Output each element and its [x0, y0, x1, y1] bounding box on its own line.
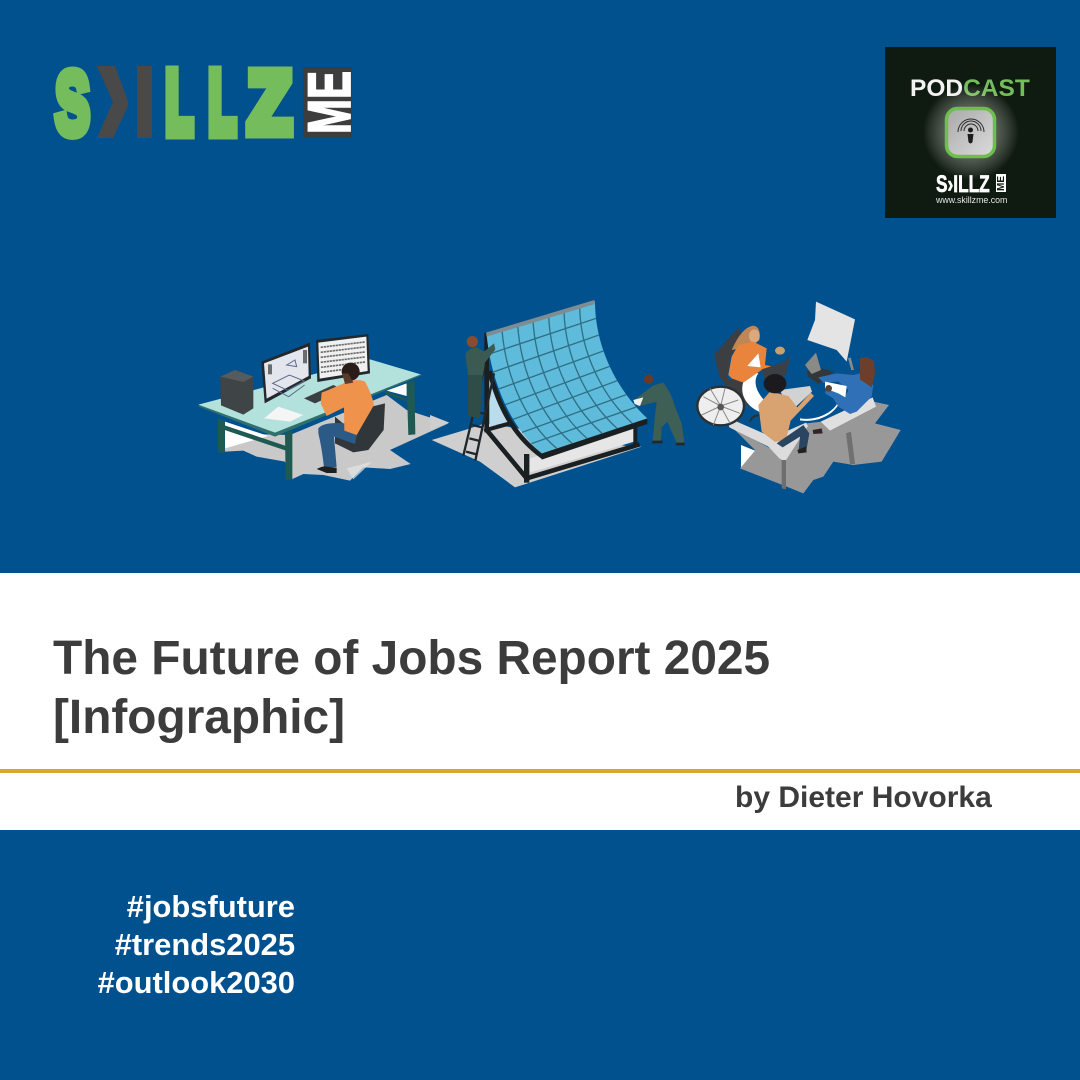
shirt	[321, 380, 374, 435]
logo chevron	[97, 66, 128, 138]
keyboard	[304, 385, 344, 403]
laptop left	[762, 355, 791, 380]
floor and chairs	[733, 402, 901, 493]
logo: SKILLZ ME: S	[56, 55, 90, 153]
left chair seat	[728, 419, 808, 462]
gold divider	[0, 769, 1080, 773]
hashtags: #jobsfuture	[127, 889, 295, 924]
title: [Infographic]	[53, 691, 345, 744]
logo: SKILLZ ME: Z	[248, 53, 291, 151]
podcast icon	[946, 108, 994, 156]
illustration: meeting around table	[697, 302, 901, 493]
ladder	[463, 365, 494, 461]
jeans	[318, 423, 357, 467]
wheelchair	[697, 328, 760, 425]
floor	[432, 423, 642, 487]
shoe	[317, 466, 337, 473]
office chair	[335, 403, 385, 452]
podcast heading: PODCAST	[910, 75, 1030, 102]
desk top	[197, 360, 422, 437]
title: The Future of Jobs Report 2025	[53, 632, 770, 685]
curved panel	[487, 302, 647, 453]
worker on ladder	[465, 336, 495, 418]
logo ME badge: ME	[296, 71, 363, 134]
shoes	[813, 428, 823, 434]
desk legs	[218, 380, 415, 480]
coffee cup	[775, 347, 785, 355]
author byline: by Dieter Hovorka	[735, 781, 992, 814]
title	[53, 632, 770, 744]
head	[342, 363, 360, 381]
woman in orange	[728, 326, 773, 383]
whiteboard	[807, 302, 855, 362]
panel grid	[489, 306, 636, 448]
woman in blue	[818, 357, 875, 414]
laptop right	[807, 368, 834, 384]
logo: SKILLZ ME: L	[166, 54, 193, 151]
illustration: solar panel installers	[430, 300, 685, 487]
logo bar	[137, 66, 152, 138]
table	[742, 372, 840, 421]
right chair seat	[821, 397, 876, 431]
monitor right	[316, 334, 370, 382]
panel stand	[487, 335, 647, 480]
hashtags: #trends2025	[115, 927, 295, 962]
logo: SKILLZ ME: L	[209, 54, 236, 151]
computer tower	[220, 370, 253, 415]
website: www.skillzme.com	[935, 195, 1007, 205]
hashtags	[98, 889, 295, 1000]
white title band	[0, 573, 1080, 830]
hashtags: #outlook2030	[98, 965, 295, 1000]
monitor left	[261, 343, 311, 403]
podcast badge	[885, 47, 1056, 218]
floor shadow	[225, 395, 448, 481]
paper	[264, 407, 303, 422]
small logo ME: ME	[996, 176, 1007, 191]
panel top edge	[486, 300, 595, 337]
illustration: engineer at desk	[197, 334, 448, 481]
worker pushing panel	[633, 375, 685, 445]
logo: SKILLZ ME	[56, 53, 363, 153]
man in beige	[758, 374, 814, 453]
small logo: S›ILLZ	[936, 171, 990, 198]
icon glow	[923, 84, 1019, 180]
